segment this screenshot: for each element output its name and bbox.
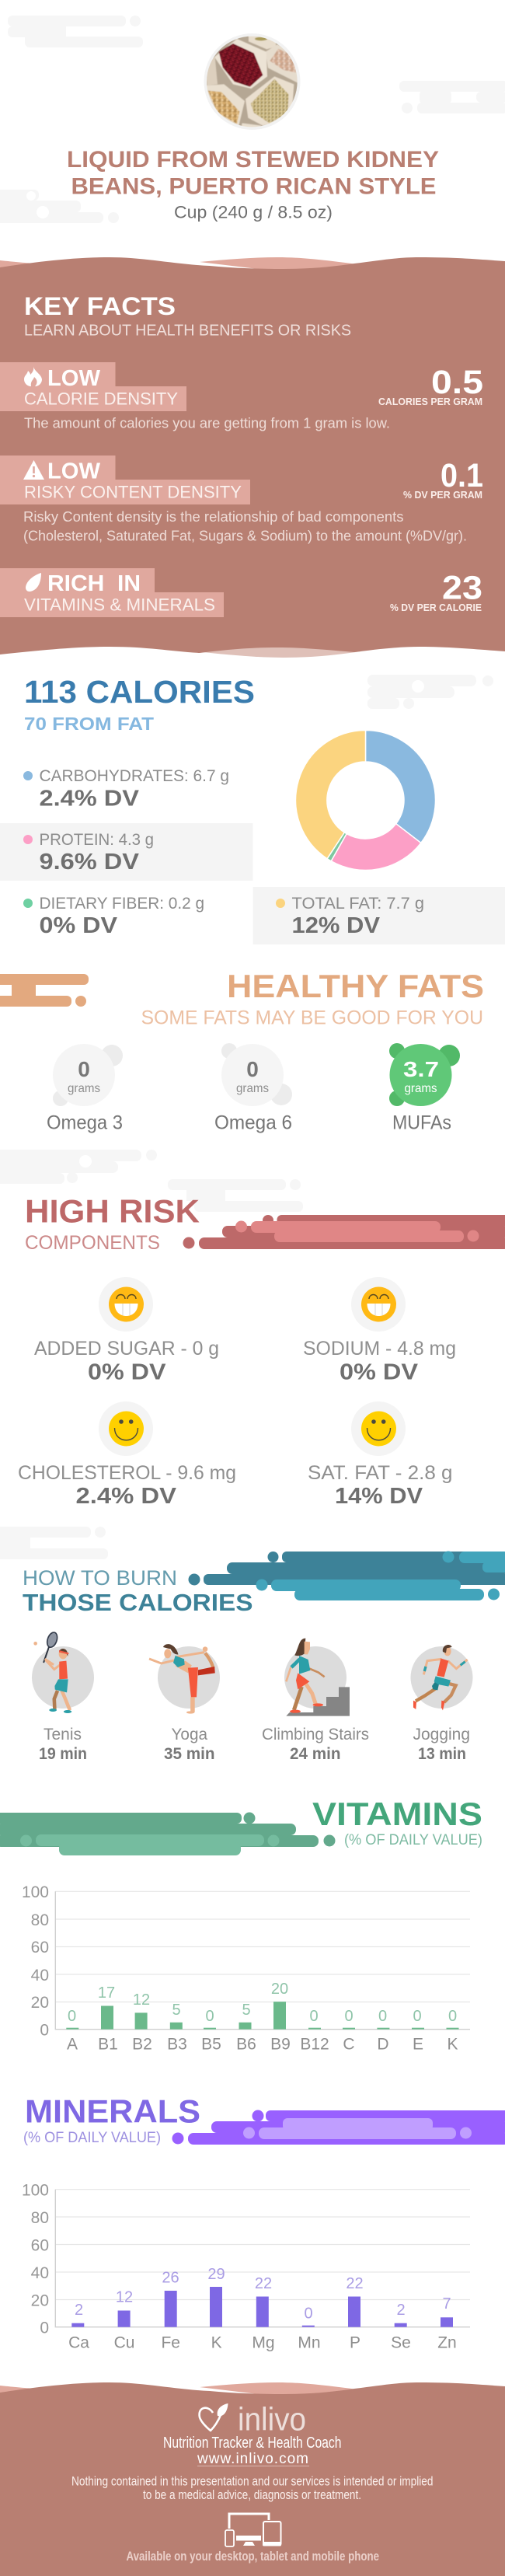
tagline and link: www.inlivo.com (197, 2451, 308, 2467)
icon: runner (413, 1645, 468, 1710)
cloud: above calories burn (0, 1527, 108, 1559)
title (67, 147, 439, 199)
stat: MUFAs: 3.7 (403, 1057, 439, 1081)
icon: tennis player (33, 1631, 71, 1713)
disclaimer (71, 2475, 434, 2502)
bar chart: vitamins: 20 (31, 1994, 49, 2012)
stat: omega 6 (214, 1043, 292, 1133)
bar chart: vitamins: 0 (378, 2008, 387, 2025)
bar chart: minerals: Mn (298, 2333, 321, 2352)
bar chart: vitamins: B6 (236, 2035, 256, 2054)
bar chart: minerals: 29 (207, 2266, 225, 2283)
bar chart: vitamins: 0 (68, 2008, 76, 2025)
icon: flame (24, 366, 42, 386)
bar chart: minerals: 22 (255, 2275, 272, 2292)
bar chart: vitamins: 5 (172, 2002, 181, 2019)
bar chart: vitamins: 80 (31, 1911, 49, 1929)
bar chart: vitamins: 60 (31, 1939, 49, 1956)
fact: risky content density: % DV PER GRAM (403, 489, 482, 501)
tagline and link: Nutrition Tracker & Health Coach (163, 2435, 342, 2452)
fact: rich in vitamins and minerals (0, 568, 482, 617)
bar chart: vitamins: B12 (300, 2035, 329, 2054)
macro: carbohydrates: CARBOHYDRATES: 6.7 g (39, 767, 229, 785)
bar chart: minerals: 7 (442, 2295, 451, 2312)
logo: inlivo heart and leaf: inlivo (238, 2400, 306, 2438)
bar chart: vitamins: 20 (271, 1981, 288, 1998)
heading: how to burn those calories (23, 1566, 253, 1616)
serving size: Cup (240 g / 8.5 oz) (174, 202, 333, 222)
cloud: left of title (0, 190, 119, 223)
heading: vitamins: VITAMINS (312, 1796, 482, 1832)
stat: omega 6: 0 (246, 1057, 259, 1081)
heading: minerals: MINERALS (25, 2093, 200, 2130)
macro: protein (0, 823, 253, 881)
bar chart: minerals: 22 (346, 2275, 364, 2292)
exercise: yoga: Yoga (171, 1726, 207, 1744)
risk: saturated fat (308, 1401, 452, 1509)
bar chart: minerals: 0 (304, 2305, 313, 2323)
bar chart: vitamins: B1 (98, 2035, 118, 2054)
stat: omega 6: grams (236, 1082, 269, 1095)
decoration: vitamins band (0, 1813, 336, 1855)
exercise: yoga (149, 1644, 220, 1763)
bar chart: vitamins: 0 (40, 2021, 49, 2040)
heading: high risk (25, 1192, 200, 1254)
risk: cholesterol (18, 1401, 236, 1509)
bar chart: minerals: 2 (75, 2302, 83, 2319)
exercise: jogging (410, 1645, 472, 1763)
heading: vitamins (312, 1796, 482, 1848)
fact: risky content density: LOW (47, 459, 101, 483)
fact: rich in vitamins and minerals: RICH IN (47, 571, 141, 596)
bar chart: minerals: P (350, 2333, 360, 2352)
bar chart: vitamins: 0 (344, 2008, 354, 2025)
exercise: tennis (32, 1631, 94, 1763)
bar chart: vitamins: B2 (132, 2035, 152, 2054)
stat: omega 3: grams (68, 1082, 100, 1095)
bar chart: minerals: 2 (396, 2302, 406, 2319)
bar chart: vitamins: B5 (201, 2035, 221, 2054)
bar chart: vitamins: 0 (413, 2008, 422, 2025)
stat: omega 3 (47, 1044, 123, 1133)
icon: woman on stairs (286, 1639, 350, 1716)
logo: inlivo heart and leaf (200, 2400, 306, 2438)
heading: high risk: COMPONENTS (25, 1232, 160, 1254)
bar chart: vitamins: 100 (22, 1883, 49, 1901)
bar chart: minerals: 80 (31, 2209, 49, 2227)
heading: key facts: LEARN ABOUT HEALTH BENEFITS OR RISKS (24, 322, 351, 339)
heading: minerals: (% OF DAILY VALUE) (23, 2130, 161, 2146)
risk: sodium (303, 1277, 456, 1385)
exercise: tennis: Tenis (44, 1726, 82, 1744)
bar chart: vitamins: K (447, 2035, 458, 2054)
icon: grinning face (109, 1287, 144, 1321)
heading: healthy fats: SOME FATS MAY BE GOOD FOR YOU (141, 1007, 483, 1029)
macro: total fat: 12% DV (292, 913, 381, 938)
fact: calorie density: CALORIE DENSITY (24, 389, 178, 409)
exercise: climbing stairs (262, 1639, 369, 1763)
exercise: yoga: 35 min (164, 1745, 214, 1763)
bar chart: minerals (22, 2181, 470, 2352)
panel: key facts (0, 257, 505, 658)
fact: rich in vitamins and minerals: VITAMINS & MINERALS (24, 595, 215, 614)
decoration: healthy fats cloud (0, 974, 89, 1007)
bar chart: minerals: Fe (161, 2333, 180, 2352)
decoration: minerals band (172, 2110, 505, 2145)
exercise: tennis: 19 min (39, 1745, 87, 1763)
heading: high risk: HIGH RISK (25, 1192, 200, 1230)
bar chart: minerals: Cu (114, 2333, 134, 2352)
stat: omega 3: Omega 3 (47, 1112, 123, 1133)
stat: MUFAs: MUFAs (392, 1112, 451, 1133)
icon: smiling face (361, 1412, 396, 1446)
heading: healthy fats (141, 968, 484, 1029)
title: LIQUID FROM STEWED KIDNEY (67, 147, 439, 173)
heading: how to burn those calories: THOSE CALORIES (23, 1589, 253, 1616)
bar chart: vitamins: 40 (31, 1967, 49, 1984)
macro: protein: 9.6% DV (39, 850, 140, 874)
risk: cholesterol: CHOLESTEROL - 9.6 mg (18, 1462, 236, 1484)
bar chart: minerals: Zn (437, 2333, 457, 2352)
decoration: high risk band (183, 1215, 505, 1249)
bar chart: vitamins (22, 1883, 470, 2054)
stat: omega 6: Omega 6 (214, 1112, 292, 1133)
fact: rich in vitamins and minerals: % DV PER CALORIE (390, 602, 482, 613)
fact: risky content density (0, 456, 483, 544)
disclaimer: to be a medical advice, diagnosis or treatment. (143, 2488, 361, 2502)
bar chart: minerals: 20 (31, 2292, 49, 2310)
icon: yoga pose (149, 1644, 215, 1714)
macro: dietary fiber: 0% DV (39, 913, 118, 938)
icon: smiling face (109, 1412, 144, 1446)
bar chart: vitamins: A (67, 2035, 78, 2054)
disclaimer: Nothing contained in this presentation and our services is intended or implied (71, 2475, 434, 2489)
risk: cholesterol: 2.4% DV (76, 1484, 177, 1509)
bar chart: minerals: 26 (162, 2270, 179, 2287)
bar chart: vitamins: 0 (309, 2008, 319, 2025)
fact: calorie density: The amount of calories you are getting from 1 gram is low. (24, 415, 390, 431)
macro: protein: PROTEIN: 4.3 g (39, 831, 154, 849)
title: BEANS, PUERTO RICAN STYLE (71, 174, 437, 199)
cloud: top right (399, 81, 505, 113)
heading: vitamins: (% OF DAILY VALUE) (344, 1832, 482, 1848)
bar chart: minerals: 100 (22, 2181, 49, 2200)
bar chart: minerals: Se (391, 2333, 411, 2352)
macro: total fat: TOTAL FAT: 7.7 g (292, 895, 424, 913)
bar chart: vitamins: E (413, 2035, 423, 2054)
bar chart: minerals: 40 (31, 2264, 49, 2282)
macro: total fat (253, 887, 505, 944)
macro: carbohydrates: 2.4% DV (39, 787, 140, 812)
macro: dietary fiber: DIETARY FIBER: 0.2 g (39, 895, 204, 913)
donut chart: macronutrients (296, 731, 435, 870)
bar chart: vitamins: 0 (448, 2008, 457, 2025)
risk: added sugar: ADDED SUGAR - 0 g (34, 1338, 219, 1360)
tagline and link (163, 2435, 342, 2467)
footer (0, 2382, 505, 2576)
heading: calories: 113 CALORIES (24, 674, 255, 710)
bar chart: vitamins: 5 (242, 2002, 251, 2019)
risk: added sugar: 0% DV (88, 1360, 166, 1385)
cloud: middle left (0, 1150, 157, 1184)
fact: calorie density: LOW (47, 366, 101, 391)
fact: risky content density: (Cholesterol, Saturated Fat, Sugars & Sodium) to the amount (%DV/gr). (23, 529, 467, 544)
fact: rich in vitamins and minerals: 23 (442, 569, 482, 606)
bar chart: minerals: 12 (116, 2288, 133, 2305)
icon: devices (225, 2514, 281, 2546)
exercise: climbing stairs: Climbing Stairs (262, 1726, 369, 1744)
risk: added sugar (34, 1277, 219, 1385)
stat: omega 3: 0 (78, 1057, 90, 1081)
bar chart: vitamins: C (343, 2035, 355, 2054)
risk: sodium: 0% DV (340, 1360, 419, 1385)
cloud: top left (8, 16, 143, 47)
fact: calorie density: CALORIES PER GRAM (378, 396, 482, 407)
fact: calorie density (0, 362, 483, 431)
cloud: calories (367, 675, 493, 709)
heading: healthy fats: HEALTHY FATS (227, 968, 484, 1004)
bar chart: minerals: 60 (31, 2237, 49, 2254)
exercise: climbing stairs: 24 min (290, 1745, 340, 1763)
fact: risky content density: Risky Content density is the relationship of bad components (23, 509, 404, 525)
macro: dietary fiber (23, 895, 204, 938)
food photo: beans in sacks (204, 33, 301, 130)
bar chart: minerals: Ca (68, 2333, 89, 2352)
decoration: burn band (188, 1552, 505, 1600)
heading: key facts: KEY FACTS (24, 292, 176, 320)
risk: saturated fat: SAT. FAT - 2.8 g (308, 1462, 452, 1484)
heading: calories: 70 FROM FAT (24, 714, 154, 734)
bar chart: vitamins: D (377, 2035, 389, 2054)
fact: calorie density: 0.5 (431, 364, 483, 401)
bar chart: vitamins: B3 (167, 2035, 187, 2054)
exercise: jogging: Jogging (413, 1726, 470, 1744)
bar chart: vitamins: 0 (205, 2008, 214, 2025)
bar chart: minerals: Mg (252, 2333, 275, 2352)
risk: sodium: SODIUM - 4.8 mg (303, 1338, 456, 1360)
heading: calories (24, 674, 255, 734)
risk: saturated fat: 14% DV (335, 1484, 423, 1509)
fact: risky content density: RISKY CONTENT DENSITY (24, 482, 242, 502)
exercise: jogging: 13 min (418, 1745, 466, 1763)
macro: carbohydrates (23, 767, 229, 812)
icon: leaf (26, 573, 41, 592)
heading: key facts (24, 292, 351, 339)
cloud: above high risk band (168, 1179, 303, 1212)
icon: grinning face (361, 1287, 396, 1321)
icon: warning triangle (23, 460, 44, 480)
bar chart: vitamins: 12 (133, 1991, 150, 2009)
heading: how to burn those calories: HOW TO BURN (23, 1566, 177, 1590)
bar chart: vitamins: 17 (98, 1984, 115, 2002)
bar chart: minerals: 0 (40, 2319, 49, 2337)
heading: minerals (23, 2093, 200, 2146)
fact: risky content density: 0.1 (441, 457, 483, 494)
stat: MUFAs: grams (404, 1082, 437, 1095)
stat: MUFAs (389, 1043, 460, 1133)
availability note: Available on your desktop, tablet and mobile phone (126, 2550, 379, 2564)
bar chart: minerals: K (211, 2333, 222, 2352)
bar chart: vitamins: B9 (270, 2035, 291, 2054)
